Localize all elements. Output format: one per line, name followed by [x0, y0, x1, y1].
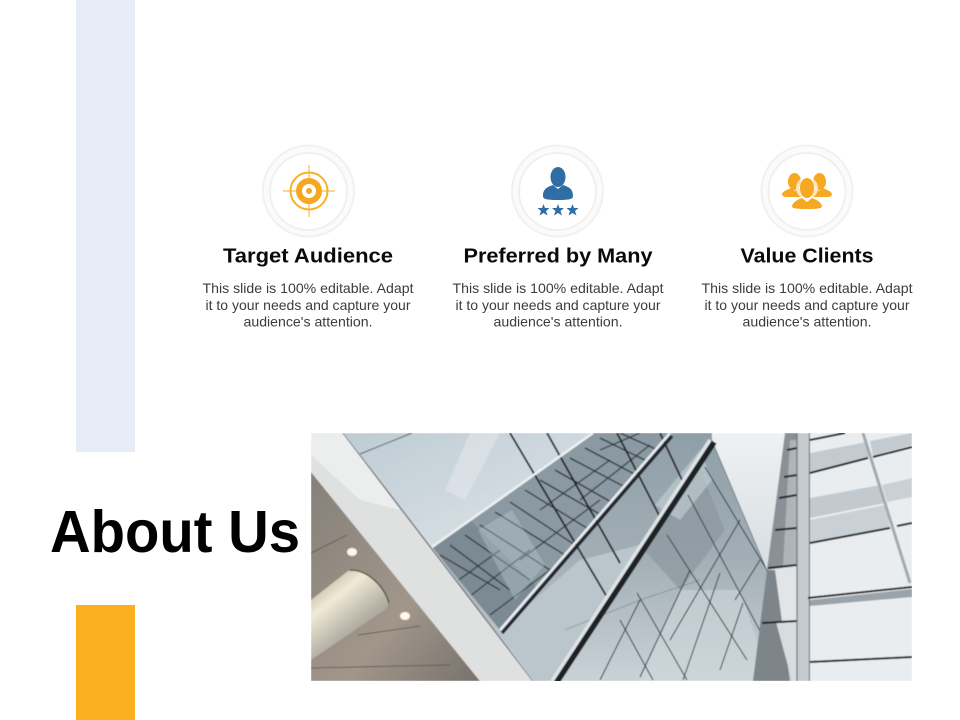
- heading: Value Clients: [740, 246, 874, 268]
- thin dark mullions: [510, 433, 682, 597]
- lower diamonds: [565, 440, 768, 681]
- description: [702, 280, 913, 330]
- description: it to your needs and capture your: [206, 297, 411, 313]
- description: audience's attention.: [742, 314, 872, 330]
- glass bars: [432, 433, 593, 547]
- heading: Target Audience: [223, 246, 393, 268]
- dark reflection: [432, 433, 656, 629]
- soffit: [311, 472, 480, 681]
- description: it to your needs and capture your: [456, 297, 661, 313]
- white beam: [312, 456, 531, 680]
- decorative bar: light blue: [76, 0, 135, 452]
- grey strip: [767, 433, 797, 570]
- heading: Preferred by Many: [464, 246, 653, 268]
- description: it to your needs and capture your: [704, 297, 910, 313]
- pipe: [311, 571, 388, 660]
- column: [797, 433, 810, 681]
- gray panes right of bars: [646, 488, 724, 590]
- description: audience's attention.: [494, 314, 622, 330]
- right panes: [810, 433, 811, 681]
- icon: group of people: [762, 146, 852, 236]
- upper glass: [343, 433, 593, 547]
- photo: glass office building: [311, 433, 912, 683]
- title: About Us: [50, 499, 300, 565]
- sky reflection: [712, 433, 786, 570]
- feature: preferred by many: [452, 146, 664, 330]
- icon: person with stars: [512, 146, 603, 236]
- description: This slide is 100% editable. Adapt: [452, 280, 664, 296]
- description: audience's attention.: [244, 314, 372, 330]
- decorative bar: orange: [76, 605, 135, 720]
- description: This slide is 100% editable. Adapt: [702, 280, 913, 296]
- facade: [432, 433, 795, 681]
- description: [202, 280, 414, 330]
- feature: target audience: [202, 146, 414, 330]
- feature: value clients: [702, 146, 913, 330]
- description: This slide is 100% editable. Adapt: [202, 280, 414, 296]
- icon: target: [263, 146, 354, 236]
- lights: [347, 548, 357, 556]
- description: [452, 280, 664, 330]
